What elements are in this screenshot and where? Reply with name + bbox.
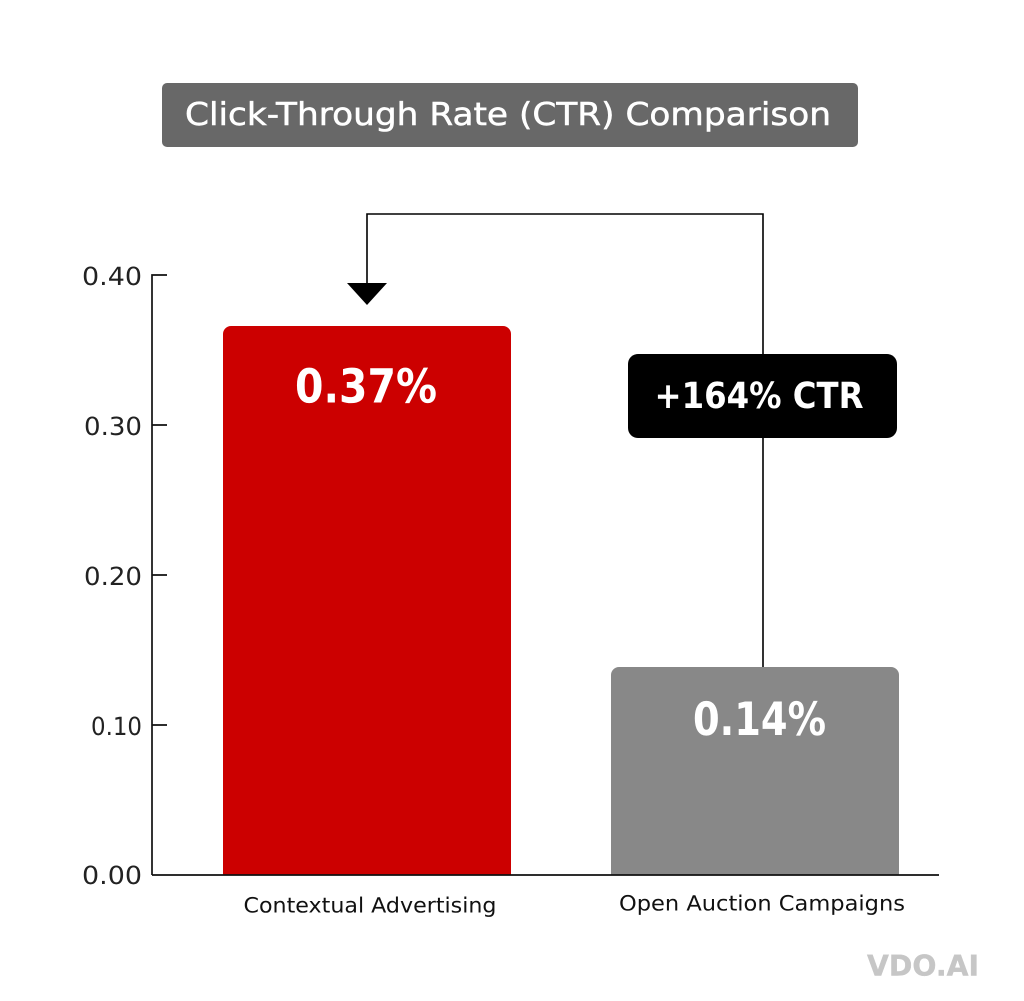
y axis: 0.40 [82,262,142,291]
logo: VDO.AI: VDO.AI [867,950,979,982]
label: contextual advertising: Contextual Advertising [244,894,496,918]
label: open auction campaigns: Open Auction Campaigns [619,892,905,916]
bar: open auction campaigns: 0.14% [693,692,826,746]
bar: contextual advertising: 0.37% [295,360,437,414]
y axis: 0.20 [84,562,142,591]
bar: open auction campaigns [611,667,899,875]
bar: contextual advertising [223,326,511,875]
y axis: 0.30 [84,412,142,441]
x axis [152,874,939,876]
title [162,83,858,147]
y axis [82,262,167,890]
callout: +164% CTR: +164% CTR [654,376,864,417]
y axis: 0.00 [82,861,142,890]
arrow: open auction to contextual [347,214,763,667]
callout: +164% CTR [628,354,897,438]
y axis: 0.10 [91,712,142,741]
title: Click-Through Rate (CTR) Comparison [185,97,831,133]
